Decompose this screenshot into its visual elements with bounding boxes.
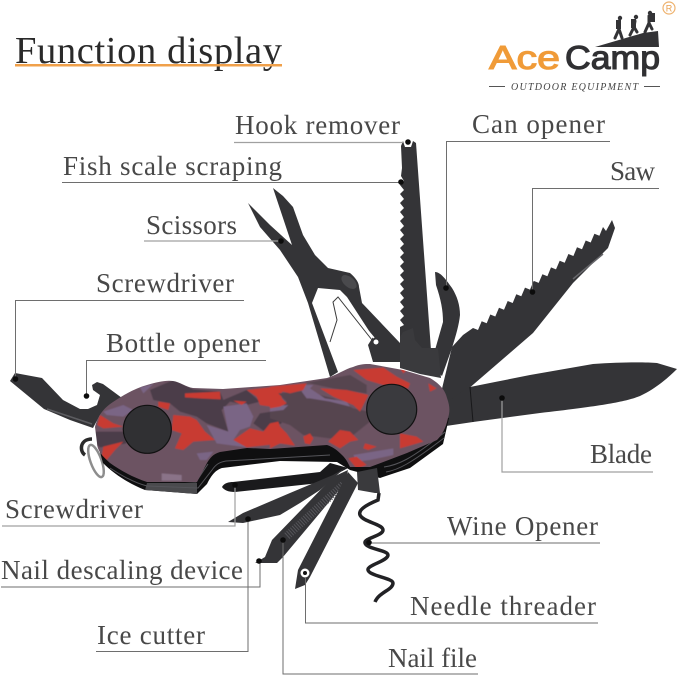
label: Wine Opener bbox=[366, 511, 600, 545]
tool: lower screwdriver bbox=[222, 463, 348, 492]
label: Screwdriver (top): Screwdriver bbox=[96, 268, 234, 298]
tool: saw bbox=[440, 220, 615, 410]
tool: bolster bbox=[400, 328, 441, 378]
logo tagline: OUTDOOR EQUIPMENT bbox=[511, 82, 639, 93]
tool: corkscrew bbox=[360, 493, 393, 602]
logo wordmark bbox=[489, 39, 660, 76]
label: Screwdriver (top) bbox=[13, 268, 244, 382]
tool: scissors bbox=[248, 188, 400, 377]
handle: right rivet cap bbox=[367, 384, 417, 434]
label: Hook remover: Hook remover bbox=[235, 110, 400, 140]
tool: blade bbox=[446, 362, 677, 426]
label: Scissors: Scissors bbox=[146, 210, 237, 240]
tool: nail file bbox=[255, 470, 348, 563]
handle: left rivet cap bbox=[123, 405, 171, 453]
label: Fish scale scraping bbox=[62, 151, 404, 185]
tool: corkscrew base bbox=[357, 468, 380, 493]
label: Blade: Blade bbox=[590, 439, 652, 469]
label: Saw: Saw bbox=[610, 156, 656, 186]
label: Bottle opener: Bottle opener bbox=[106, 328, 260, 358]
label: Blade bbox=[499, 395, 653, 472]
label: Needle threader bbox=[306, 578, 598, 623]
label: Bottle opener bbox=[84, 328, 266, 399]
label: Can opener: Can opener bbox=[472, 109, 605, 139]
label: Ice cutter: Ice cutter bbox=[97, 620, 205, 650]
label: Nail file: Nail file bbox=[388, 643, 477, 673]
label: Nail descaling device: Nail descaling device bbox=[1, 555, 243, 585]
logo wordmark: Ace bbox=[489, 39, 560, 76]
label: Screwdriver (bottom): Screwdriver bbox=[5, 494, 143, 524]
icon: registered mark bbox=[663, 2, 675, 14]
tool: hook remover and fish scale saw bbox=[400, 141, 431, 350]
logo: AceCamp bbox=[489, 2, 675, 93]
tool: left screwdriver and bottle opener bbox=[10, 373, 122, 428]
tool: ice cutter bbox=[228, 468, 345, 523]
label: Fish scale scraping: Fish scale scraping bbox=[63, 151, 282, 181]
label: Wine Opener: Wine Opener bbox=[447, 511, 598, 541]
label: Screwdriver (bottom) bbox=[2, 482, 238, 526]
logo wordmark: Camp bbox=[565, 39, 660, 76]
icon: registered mark: R bbox=[666, 4, 673, 14]
label: Saw bbox=[530, 156, 659, 295]
label: Needle threader: Needle threader bbox=[410, 591, 596, 621]
label: Scissors bbox=[144, 210, 284, 244]
label: Ice cutter bbox=[96, 516, 251, 652]
tool: can opener bbox=[430, 272, 460, 376]
icon: hikers on a slope bbox=[595, 11, 659, 47]
tool: needle threader bbox=[295, 472, 358, 589]
multitool illustration bbox=[10, 141, 677, 602]
title: Function display bbox=[15, 30, 283, 72]
icon: key ring bbox=[81, 439, 107, 479]
label: Can opener bbox=[443, 109, 610, 291]
handle liners bbox=[98, 418, 449, 494]
handle: red camouflage bbox=[95, 364, 450, 482]
label: Nail file bbox=[280, 537, 478, 674]
